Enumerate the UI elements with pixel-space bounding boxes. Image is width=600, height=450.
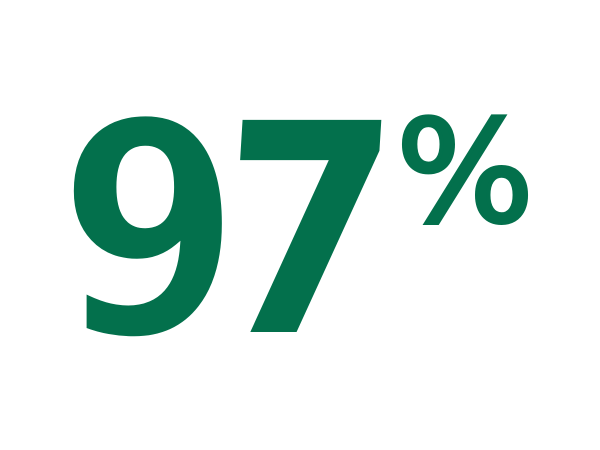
percent sign: % bbox=[396, 90, 534, 254]
digit 9: 9 bbox=[58, 57, 241, 406]
digit 7: 7 bbox=[208, 63, 405, 401]
